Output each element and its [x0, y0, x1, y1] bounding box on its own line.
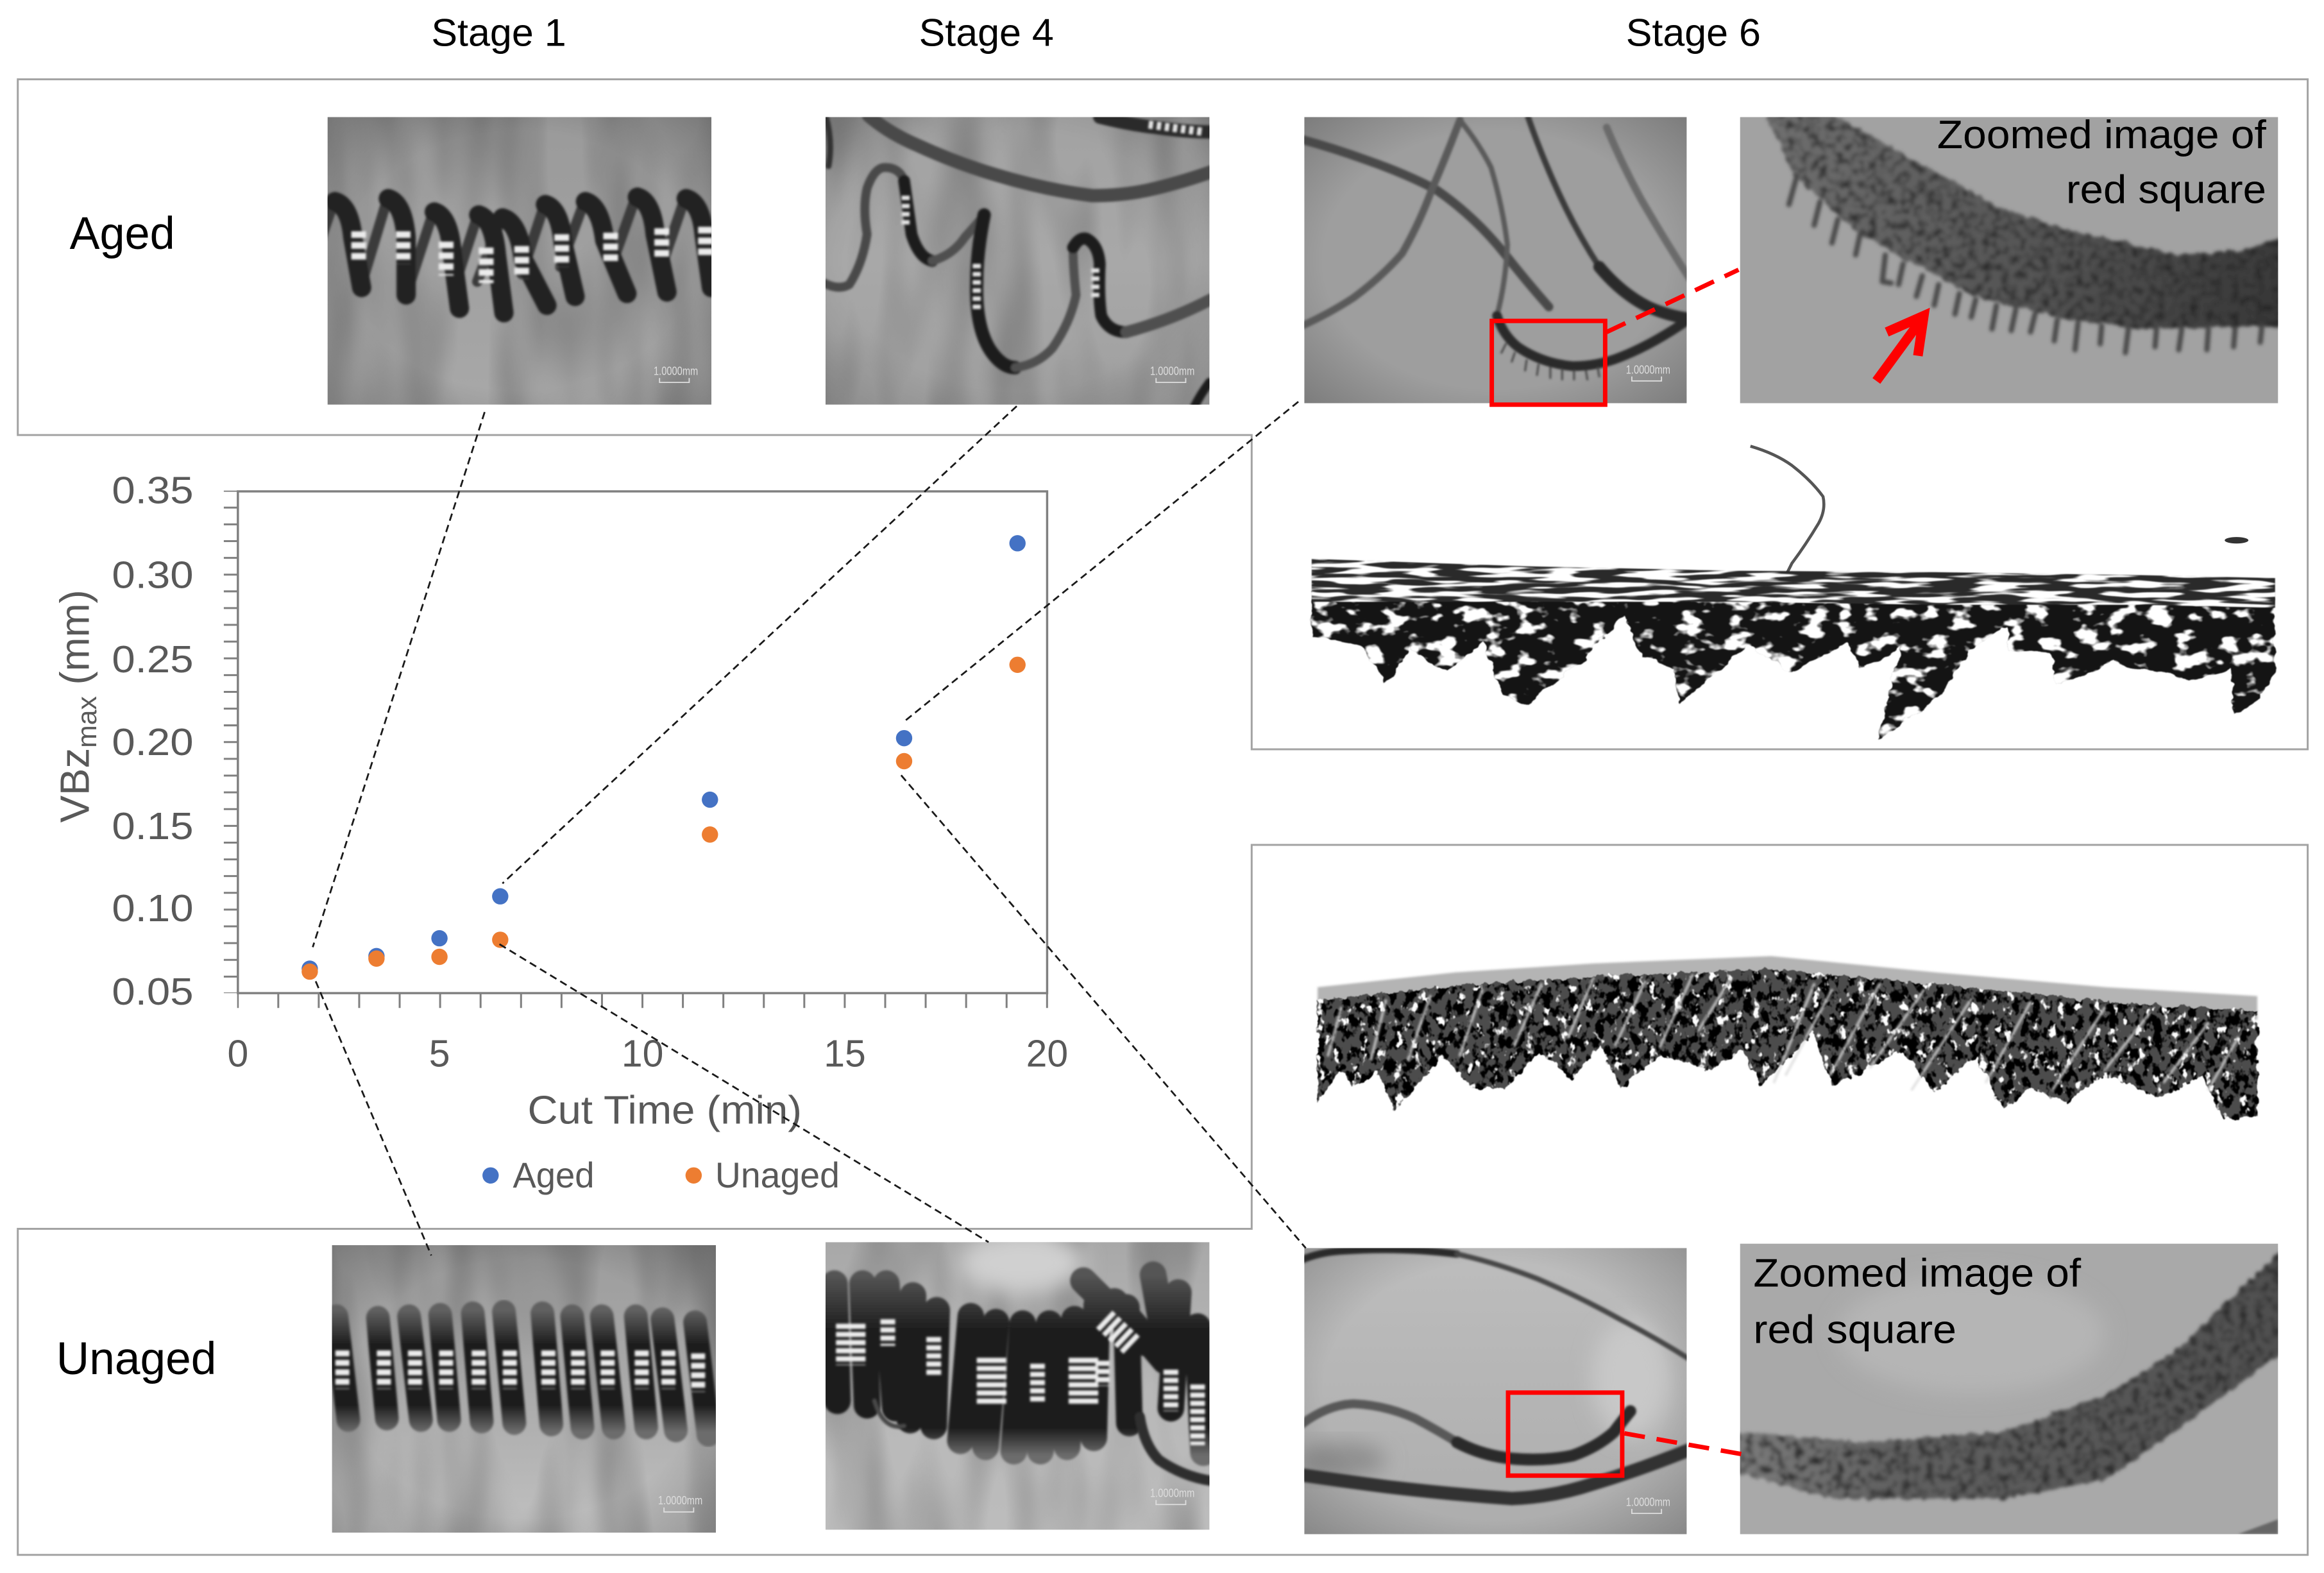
label: Aged: Aged	[70, 208, 175, 259]
image: aged tool flank wear	[1312, 446, 2275, 740]
x axis tick labels: 15	[824, 1033, 866, 1075]
y axis tick labels: 0.30	[112, 555, 194, 597]
photo: aged stage 4 chip	[824, 115, 1211, 406]
caption: aged zoomed image	[1937, 113, 2267, 212]
y axis tick labels: 0.20	[112, 722, 194, 763]
caption: aged zoomed image: Zoomed image of	[1937, 113, 2267, 157]
panel: aged outline	[18, 80, 2308, 749]
y axis title: (mm)	[53, 590, 98, 696]
red square: aged stage 6	[1492, 321, 1605, 405]
y axis title: max	[72, 696, 103, 748]
series: Unaged	[301, 657, 1026, 980]
y axis tick labels: 0.25	[112, 639, 194, 681]
photo: unaged stage 6 chip: 1.0000mm	[1626, 1495, 1670, 1509]
x axis tick labels: 20	[1026, 1033, 1068, 1075]
photo: aged stage 6 chip: 1.0000mm	[1626, 362, 1670, 376]
caption: unaged zoomed image: Zoomed image of	[1753, 1252, 2082, 1296]
caption: unaged zoomed image	[1753, 1252, 2082, 1352]
photo: aged zoomed image of red square	[1740, 113, 2282, 403]
x axis tick labels: 5	[429, 1033, 450, 1075]
photo: unaged stage 1 chip coil: 1.0000mm	[658, 1493, 702, 1507]
photo: aged stage 4 chip: 1.0000mm	[1150, 364, 1194, 378]
legend	[482, 1155, 840, 1195]
photo: aged stage 1 chip coil	[311, 117, 711, 405]
red dashed connector: unaged	[1624, 1433, 1742, 1454]
arrow: red pointer to burrs	[1876, 316, 1924, 381]
y axis tick labels: 0.10	[112, 888, 194, 930]
heading: Stage 6: Stage 6	[1626, 12, 1761, 55]
x axis tick labels	[227, 1033, 1068, 1075]
y axis tick labels: 0.15	[112, 806, 194, 847]
series: Aged	[301, 535, 1026, 977]
photo: unaged stage 4 chip coil	[826, 1233, 1211, 1530]
photo: unaged stage 6 chip	[1297, 1248, 1690, 1534]
y axis tick labels: 0.05	[112, 971, 194, 1013]
x axis tick labels: 0	[227, 1033, 248, 1075]
legend: Aged	[513, 1155, 595, 1195]
red dashed connector: aged	[1607, 270, 1738, 332]
y axis tick labels	[112, 470, 194, 1013]
photo: aged stage 1 chip coil: 1.0000mm	[654, 364, 698, 378]
photo: unaged zoomed image of red square	[1734, 1244, 2282, 1534]
y axis tick labels: 0.35	[112, 470, 194, 511]
image: unaged tool flank wear	[1318, 956, 2257, 1119]
photo: aged stage 6 chip	[1302, 117, 1690, 403]
legend: Unaged	[715, 1155, 840, 1195]
heading: Stage 1: Stage 1	[431, 12, 566, 55]
x axis tick labels: 10	[622, 1033, 663, 1075]
panel: unaged outline	[18, 845, 2308, 1555]
x axis title: Cut Time (min)	[528, 1088, 802, 1132]
photo: unaged stage 4 chip coil: 1.0000mm	[1150, 1486, 1194, 1500]
heading: Stage 4: Stage 4	[919, 12, 1054, 55]
photo: unaged stage 1 chip coil	[332, 1245, 716, 1533]
scatter chart: VBz max versus cut time	[53, 470, 1068, 1195]
caption: aged zoomed image: red square	[2066, 168, 2266, 212]
red square: unaged stage 6	[1508, 1393, 1622, 1475]
dashed leader lines from chart points to photos	[313, 402, 1306, 1255]
caption: unaged zoomed image: red square	[1753, 1307, 1956, 1352]
y axis title: VBz	[53, 748, 98, 822]
label: Unaged: Unaged	[56, 1333, 216, 1384]
